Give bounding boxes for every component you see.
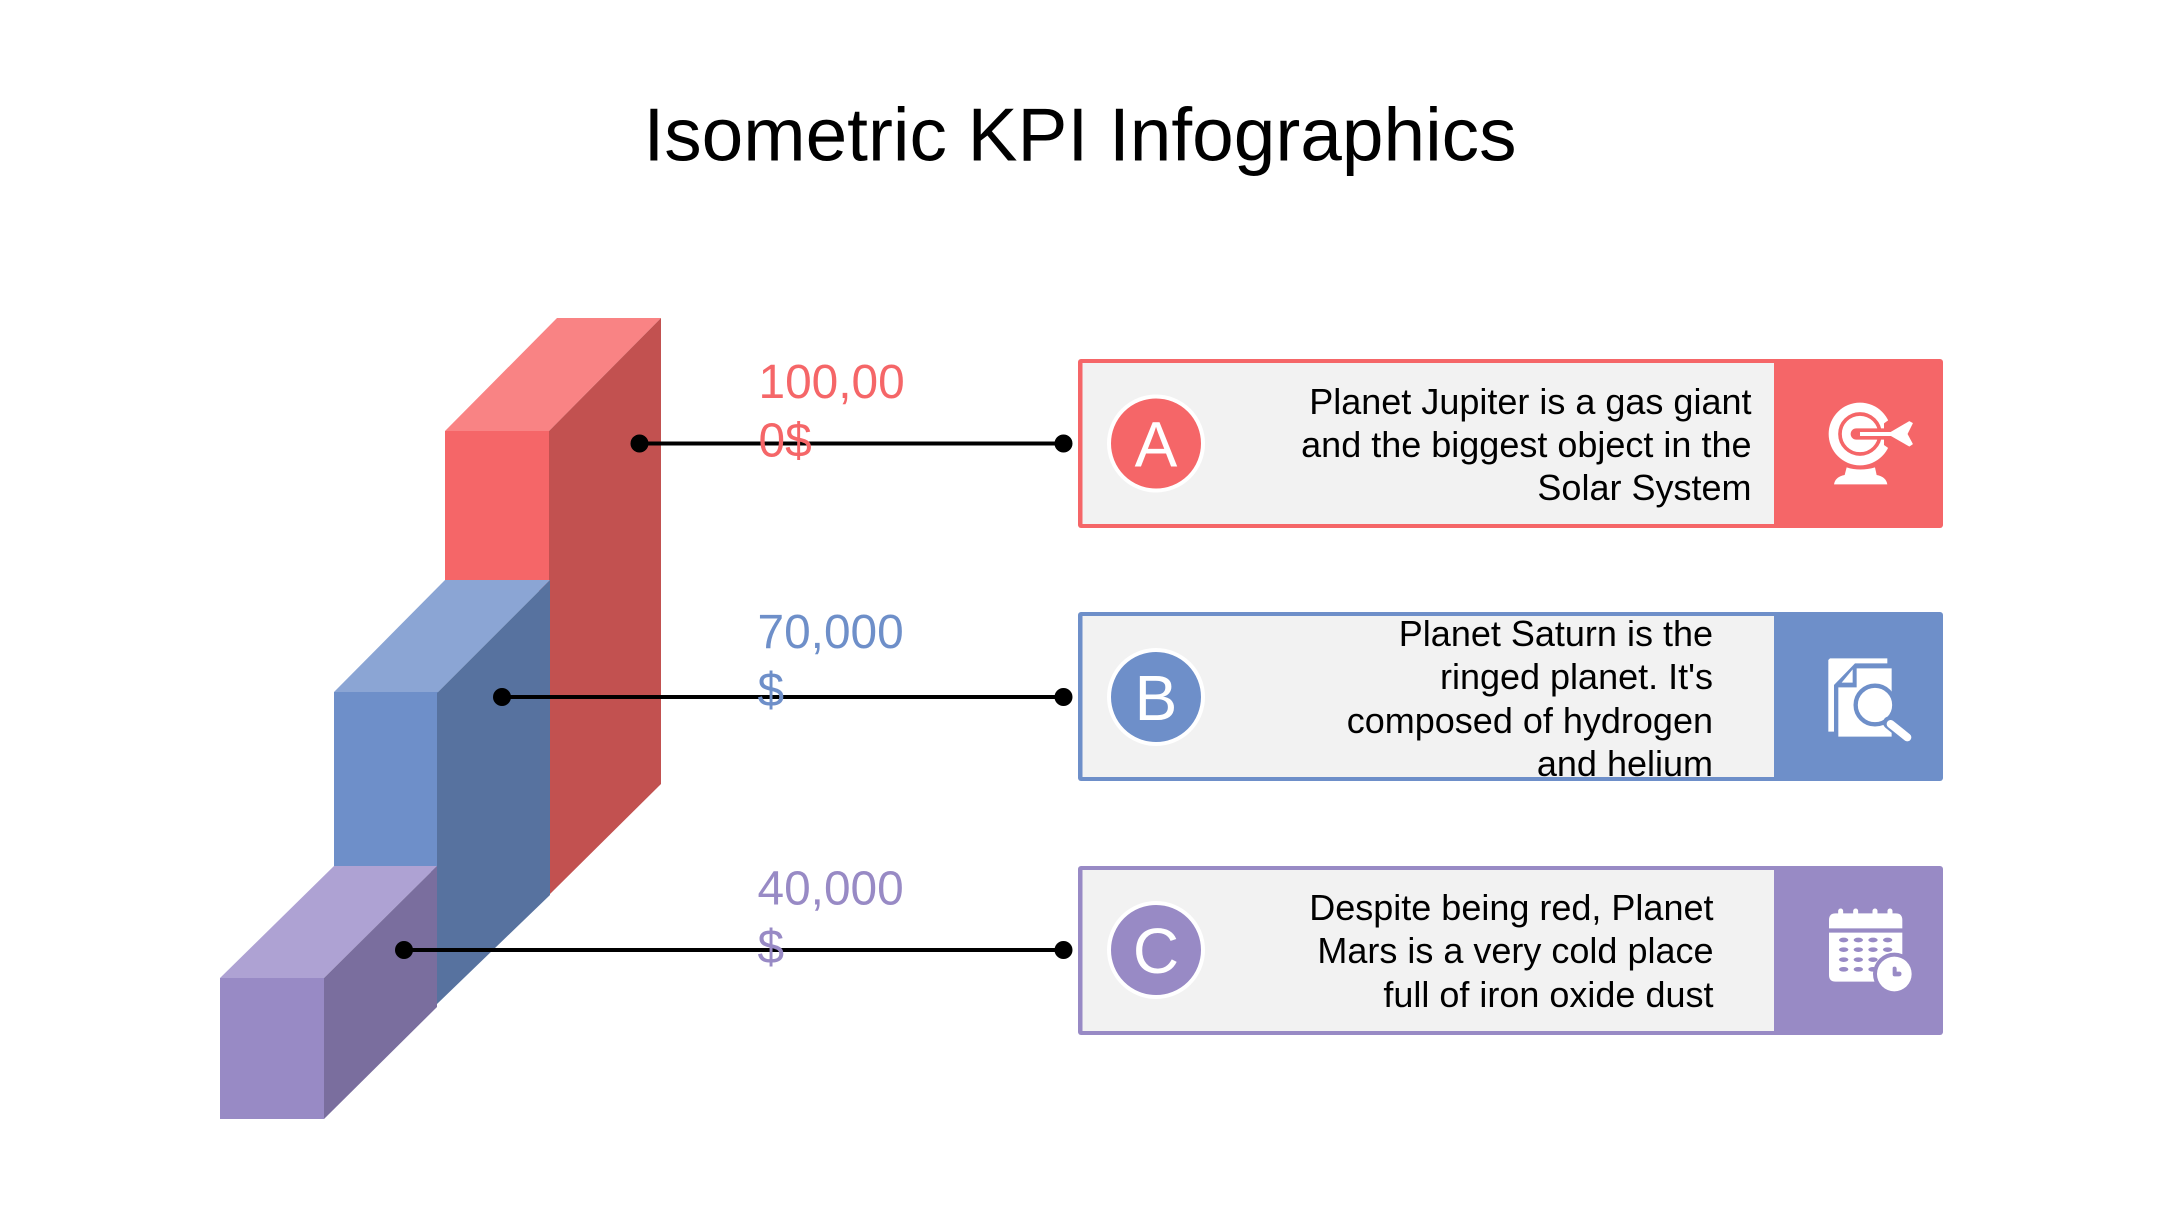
panel: A: [1078, 359, 1943, 528]
bar: purple 40,000$: [220, 866, 437, 1119]
value B: 70,000: [758, 606, 904, 659]
description B: composed of hydrogen: [1347, 700, 1713, 741]
description A: and the biggest object in the: [1301, 424, 1752, 465]
description A: Solar System: [1537, 467, 1752, 508]
badge A: A: [1135, 408, 1178, 480]
isometric bar chart: [220, 318, 661, 1119]
description C: full of iron oxide dust: [1383, 974, 1714, 1015]
badge B: B: [1135, 662, 1177, 734]
badge A: [1109, 396, 1203, 490]
value A: 0$: [758, 414, 812, 468]
icon: target with arrow: [1829, 403, 1912, 484]
connector B: [493, 688, 1072, 706]
description B: Planet Saturn is the: [1399, 613, 1713, 654]
value B: $: [758, 664, 784, 717]
description C: Mars is a very cold place: [1317, 930, 1714, 971]
badge C: [1109, 903, 1203, 997]
icon: calendar with clock: [1829, 911, 1916, 995]
title: Isometric KPI Infographics: [644, 92, 1516, 176]
description A: Planet Jupiter is a gas giant: [1309, 381, 1752, 422]
description C: Despite being red, Planet: [1309, 887, 1714, 928]
icon: document search: [1828, 658, 1907, 737]
bar: red 100,000$: [445, 318, 661, 895]
panel: C: [1078, 866, 1943, 1035]
value C: $: [758, 921, 784, 974]
bar: blue 70,000$: [334, 580, 550, 1004]
value C: 40,000: [758, 862, 904, 916]
badge B: [1109, 650, 1203, 744]
badge C: C: [1133, 915, 1179, 987]
connector A: [630, 434, 1072, 452]
connector C: [395, 941, 1072, 959]
value A: 100,00: [758, 356, 905, 409]
description B: and helium: [1537, 743, 1713, 784]
panel: B: [1078, 612, 1943, 784]
description B: ringed planet. It's: [1440, 656, 1713, 697]
